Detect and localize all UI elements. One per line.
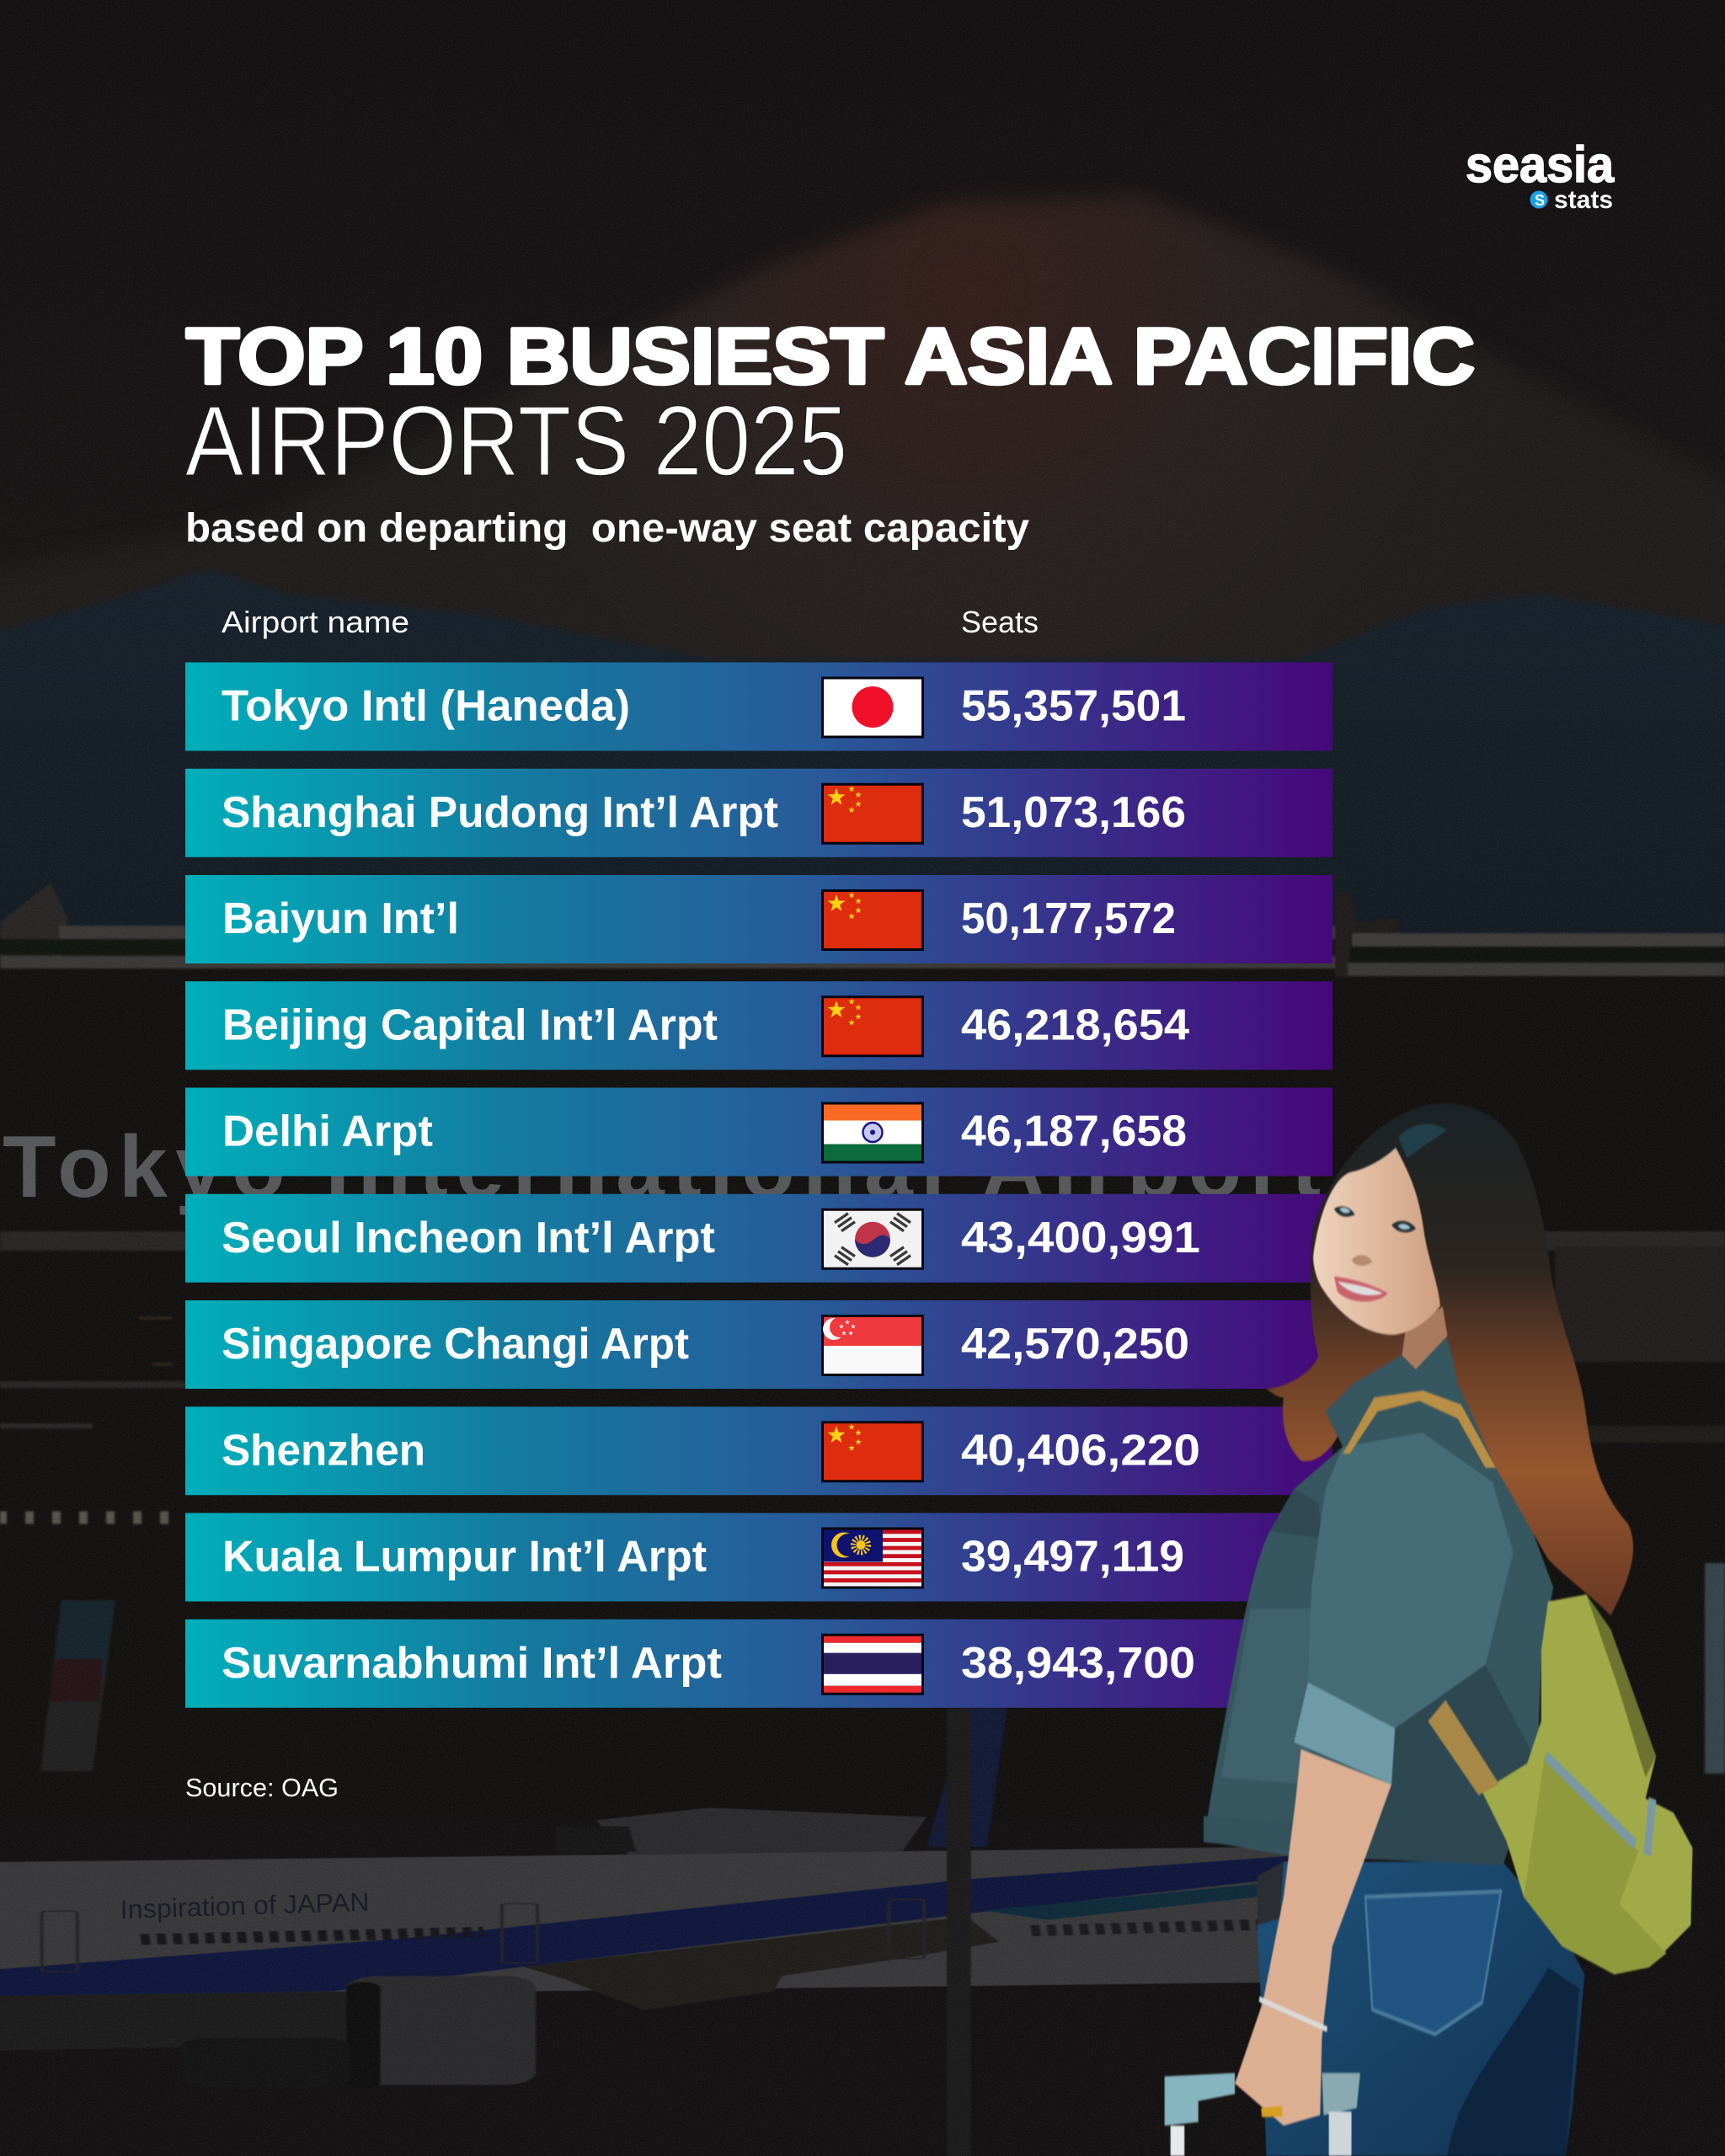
row 1: Tokyo Intl (Haneda): Tokyo Intl (Haneda) (222, 682, 630, 731)
logo: seasia stats: seasia (1466, 136, 1615, 193)
jacket (1204, 1331, 1553, 1865)
row 9: Kuala Lumpur: 39,497,119 (961, 1533, 1184, 1582)
row 6: Seoul Incheon: Seoul Incheon Int’l Arpt (222, 1214, 715, 1262)
mountains: blue foothills (0, 569, 1725, 943)
column heading: airport name: Airport name (222, 605, 409, 639)
flag: Thailand (821, 1634, 924, 1695)
row 4: Beijing Capital: Beijing Capital Int’l Arpt (222, 1001, 718, 1049)
row 9: Kuala Lumpur: Kuala Lumpur Int’l Arpt (222, 1533, 707, 1582)
sleeve (1294, 1433, 1514, 1785)
row 3: Baiyun (185, 875, 1332, 963)
row 7: Singapore Changi: 42,570,250 (961, 1320, 1189, 1369)
airplane lettering: Inspiration of JAPAN (120, 1887, 370, 1924)
row 5: Delhi (185, 1088, 1332, 1176)
row 10: Suvarnabhumi (185, 1620, 1332, 1708)
flag: Malaysia (821, 1528, 924, 1588)
row 2: Shanghai Pudong: Shanghai Pudong Int’l Arpt (222, 788, 778, 837)
hair back (1266, 1103, 1586, 1545)
flag: Japan (821, 677, 924, 738)
column heading: seats: Seats (961, 605, 1039, 639)
flag: China (821, 783, 924, 845)
jeans (1258, 1862, 1584, 2156)
face (1313, 1148, 1440, 1335)
logo: seasia stats: S (1535, 192, 1545, 209)
row 5: Delhi: Delhi Arpt (222, 1107, 433, 1155)
flag: Singapore (821, 1315, 924, 1376)
background sign text: Tokyo International Airport (3, 1118, 1321, 1216)
row 1: Tokyo Intl (Haneda): 55,357,501 (961, 682, 1186, 731)
row 7: Singapore Changi: Singapore Changi Arpt (222, 1320, 689, 1369)
logo: seasia stats: stats (1554, 186, 1613, 214)
row 6: Seoul Incheon: 43,400,991 (961, 1214, 1200, 1262)
backpack (1482, 1594, 1692, 1974)
flag: India (821, 1102, 924, 1164)
row 10: Suvarnabhumi: Suvarnabhumi Int’l Arpt (222, 1639, 722, 1688)
flag: South Korea (821, 1209, 924, 1270)
row 3: Baiyun: 50,177,572 (961, 894, 1176, 943)
airplane on the tarmac (0, 1708, 1290, 2156)
row 8: Shenzhen (185, 1406, 1332, 1495)
title (185, 312, 1475, 497)
flag: China (821, 1421, 924, 1482)
row 4: Beijing Capital: 46,218,654 (961, 1001, 1189, 1049)
row 10: Suvarnabhumi: 38,943,700 (961, 1639, 1195, 1688)
row 4: Beijing Capital (185, 981, 1332, 1070)
terminal building (0, 883, 1725, 1819)
title: TOP 10 BUSIEST ASIA PACIFIC (186, 312, 1475, 400)
row 2: Shanghai Pudong (185, 769, 1332, 857)
row 3: Baiyun: Baiyun Int’l (222, 894, 459, 943)
ring (1261, 2106, 1283, 2117)
mountain: Fuji silhouette (0, 195, 1725, 926)
suitcase handle (1165, 2073, 1235, 2126)
source note: Source: OAG (185, 1773, 339, 1802)
row 6: Seoul Incheon (185, 1194, 1332, 1283)
subtitle: based on departing one-way seat capacity (185, 506, 1029, 551)
row 9: Kuala Lumpur (185, 1513, 1332, 1602)
flag: China (821, 995, 924, 1057)
title: AIRPORTS 2025 (185, 386, 847, 497)
bracelet (1259, 1999, 1327, 2030)
bag straps (1343, 1390, 1496, 1468)
flag: China (821, 889, 924, 951)
hair front (1396, 1126, 1633, 1615)
row 8: Shenzhen: 40,406,220 (961, 1426, 1200, 1475)
arm (1235, 1749, 1391, 2126)
row 2: Shanghai Pudong: 51,073,166 (961, 788, 1186, 837)
photo: traveller with backpack (1165, 1103, 1692, 2156)
row 8: Shenzhen: Shenzhen (222, 1426, 425, 1475)
row 1: Tokyo Intl (Haneda) (185, 662, 1332, 751)
row 7: Singapore Changi (185, 1300, 1332, 1389)
neck (1402, 1306, 1449, 1369)
row 5: Delhi: 46,187,658 (961, 1107, 1187, 1155)
